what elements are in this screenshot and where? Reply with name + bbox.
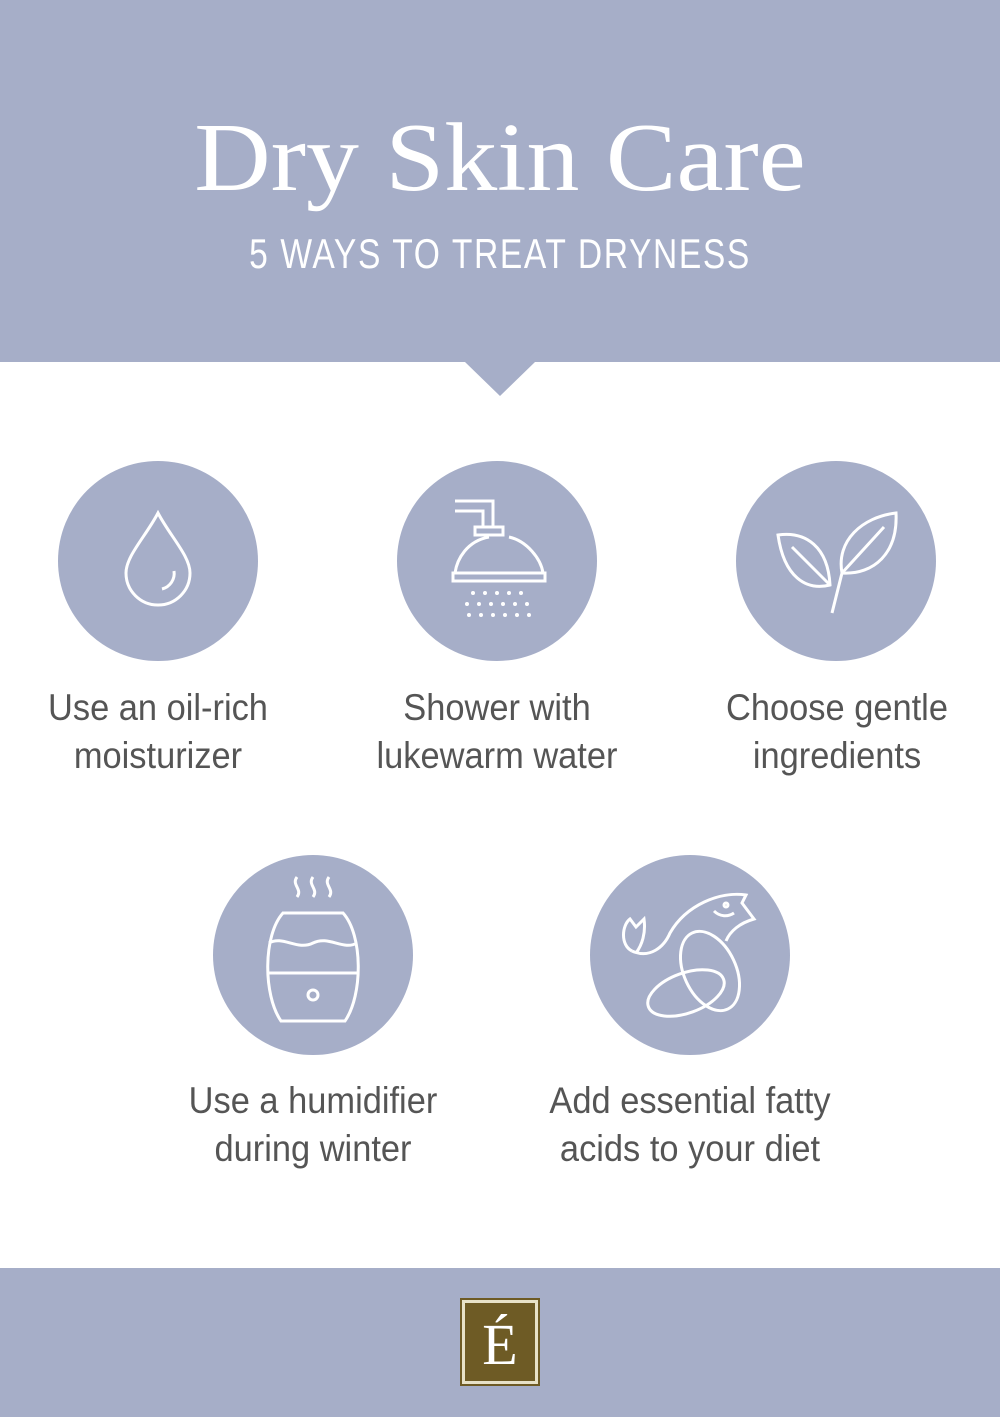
label 4: during winter — [214, 1128, 412, 1169]
label 3: ingredients — [753, 735, 921, 776]
label 1: Use an oil-rich — [48, 687, 268, 728]
footer panel — [0, 1268, 1000, 1417]
label 4: Use a humidifier — [189, 1080, 437, 1121]
icon: water drop — [58, 461, 258, 661]
header panel — [0, 0, 1000, 396]
label 5: acids to your diet — [560, 1128, 820, 1169]
icon: fish and capsules — [590, 855, 790, 1055]
icon: leaves — [736, 461, 936, 661]
label 2: Shower with — [403, 687, 591, 728]
label 1 — [48, 687, 268, 776]
icon: humidifier — [213, 855, 413, 1055]
subtitle: 5 WAYS TO TREAT DRYNESS — [249, 230, 751, 277]
logo — [462, 1300, 538, 1384]
icon: shower — [397, 461, 597, 661]
label 5: Add essential fatty — [549, 1080, 831, 1121]
title: Dry Skin Care — [194, 104, 806, 212]
label 2: lukewarm water — [377, 735, 617, 776]
label 3: Choose gentle — [726, 687, 948, 728]
label 1: moisturizer — [74, 735, 242, 776]
label 4 — [189, 1080, 437, 1169]
label 2 — [377, 687, 617, 776]
label 3 — [726, 687, 948, 776]
label 5 — [549, 1080, 831, 1169]
logo: É — [482, 1312, 518, 1377]
